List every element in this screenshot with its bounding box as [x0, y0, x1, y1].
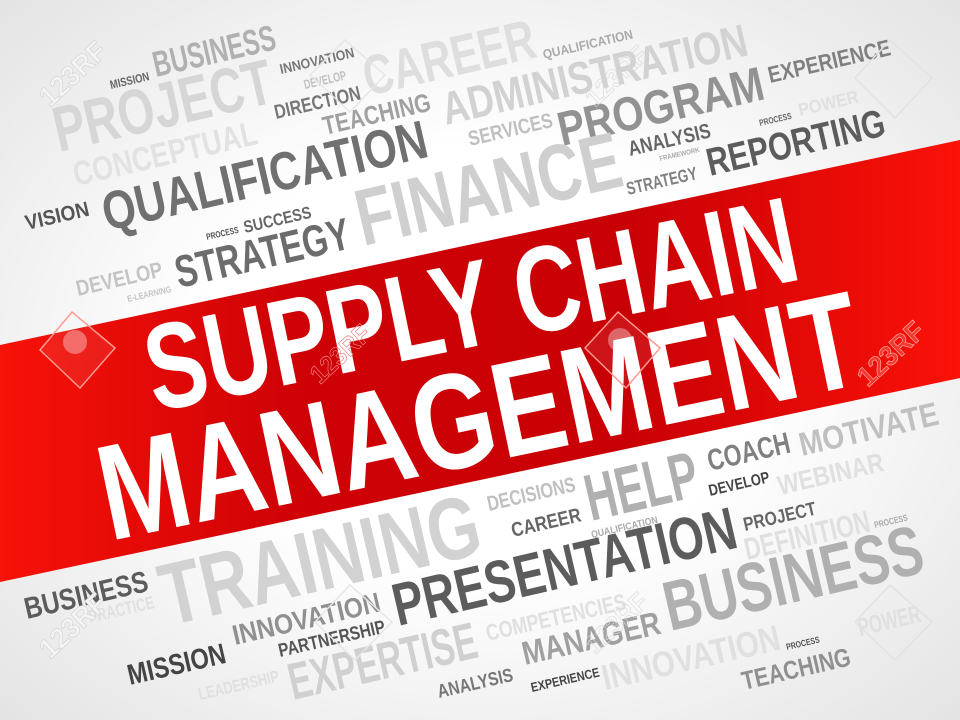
- word: experience: EXPERIENCE: [765, 34, 893, 88]
- word: direction: DIRECTION: [272, 83, 363, 124]
- watermark: lower left logo: 123RF: [33, 587, 113, 664]
- word: definition: DEFINITION: [741, 504, 873, 567]
- word: qualification: QUALIFICATION: [541, 27, 634, 62]
- watermark: band middle logo: 123RF: [304, 318, 377, 389]
- word: experience lower: EXPERIENCE: [529, 665, 601, 695]
- watermark icon: lower centre: [315, 585, 392, 660]
- word: manager: MANAGER: [518, 604, 664, 672]
- word: motivate: MOTIVATE: [795, 395, 942, 463]
- watermark: top centre logo: 123RF: [579, 39, 654, 112]
- word: process: PROCESS: [758, 111, 793, 128]
- word: reporting: REPORTING: [702, 102, 889, 185]
- watermark: lower centre logo: 123RF: [579, 586, 654, 659]
- word: teaching: TEACHING: [320, 87, 434, 141]
- word: help: HELP: [578, 437, 705, 535]
- word: teaching lower: TEACHING: [739, 642, 854, 696]
- word: develop: DEVELOP: [302, 68, 348, 92]
- word: project: PROJECT: [46, 45, 279, 166]
- word: business left: BUSINESS: [21, 565, 151, 626]
- word: conceptual: CONCEPTUAL: [69, 114, 261, 194]
- word: program: PROGRAM: [553, 58, 769, 157]
- word: webinar: WEBINAR: [775, 447, 887, 501]
- word: project small: PROJECT: [741, 499, 819, 536]
- lower word cloud: [21, 395, 942, 712]
- watermark icon: top centre: [310, 40, 385, 112]
- word: process lower: PROCESS: [785, 635, 821, 652]
- watermark icon: band centre: [585, 312, 660, 388]
- word: develop light: DEVELOP: [74, 257, 165, 301]
- word: strategy small: STRATEGY: [624, 163, 699, 199]
- word: innovation: INNOVATION: [278, 44, 356, 77]
- word: practice: PRACTICE: [86, 592, 156, 627]
- word: qualification large: QUALIFICATION: [96, 110, 433, 243]
- word: leadership: LEADERSHIP: [197, 667, 281, 704]
- word: e-learning: E-LEARNING: [126, 284, 172, 304]
- word: presentation: PRESENTATION: [386, 494, 743, 639]
- word: strategy: STRATEGY: [170, 208, 355, 298]
- word: services: SERVICES: [466, 109, 555, 151]
- word: analysis lower: ANALYSIS: [435, 665, 515, 703]
- word: finance: FINANCE: [347, 115, 630, 263]
- watermark: right of band logo: 123RF: [851, 315, 931, 392]
- word: success: SUCCESS: [242, 203, 313, 237]
- word: expertise: EXPERTISE: [283, 612, 483, 712]
- word: qualification tiny: QUALIFICATION: [590, 515, 659, 541]
- word: decisions: DECISIONS: [485, 473, 578, 516]
- word: process right: PROCESS: [873, 513, 909, 530]
- watermark icon: band left: [40, 312, 115, 388]
- upper word cloud: [23, 7, 893, 304]
- word: framework: FRAMEWORK: [659, 147, 700, 163]
- word: training: TRAINING: [150, 475, 490, 645]
- title: [85, 171, 874, 569]
- word: analysis: ANALYSIS: [626, 120, 713, 161]
- word: power: POWER: [796, 87, 860, 120]
- word: coach: COACH: [704, 427, 793, 478]
- word: partnership: PARTNERSHIP: [276, 617, 388, 662]
- word: innovation mid: INNOVATION: [229, 587, 383, 651]
- word: process small: PROCESS: [205, 225, 240, 242]
- word: mission lower: MISSION: [124, 638, 229, 692]
- red diagonal band: [0, 140, 960, 582]
- word: competencies: COMPETENCIES: [483, 588, 628, 646]
- watermark icon: top right: [855, 40, 932, 118]
- word: business: BUSINESS: [149, 17, 280, 85]
- word: mission: MISSION: [109, 69, 151, 92]
- watermark icon: lower right: [855, 585, 932, 660]
- watermark: top left logo: 123RF: [33, 35, 113, 112]
- word: develop dark: DEVELOP: [707, 469, 772, 500]
- word: vision: VISION: [23, 198, 91, 235]
- word: career dark: CAREER: [509, 504, 584, 542]
- word: innovation light: INNOVATION: [598, 617, 784, 698]
- word: power lower: POWER: [855, 600, 924, 642]
